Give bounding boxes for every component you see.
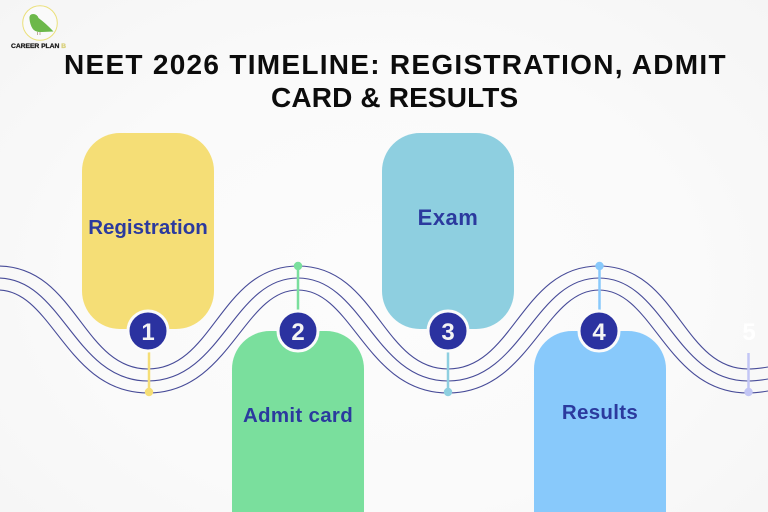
step number badges: 4 (592, 319, 606, 346)
label: exam: Exam (418, 205, 478, 230)
logo: CAREER PLAN B (11, 43, 66, 50)
panel: registration card (82, 133, 214, 329)
step number badges: 5 (742, 319, 756, 346)
label: results: Results (562, 401, 638, 424)
step number badges: 2 (291, 319, 305, 346)
panel: exam card (382, 133, 514, 329)
title: NEET 2026 TIMELINE: REGISTRATION, ADMIT (64, 49, 727, 80)
label: admit card: Admit card (243, 404, 353, 427)
logo (11, 5, 66, 50)
label: registration: Registration (88, 216, 208, 239)
step number badges: 3 (441, 319, 455, 346)
panel: admit card (232, 331, 364, 512)
title (64, 49, 727, 113)
panel: results card (534, 331, 666, 512)
title: CARD & RESULTS (271, 82, 518, 113)
step number badges: 1 (141, 319, 155, 346)
